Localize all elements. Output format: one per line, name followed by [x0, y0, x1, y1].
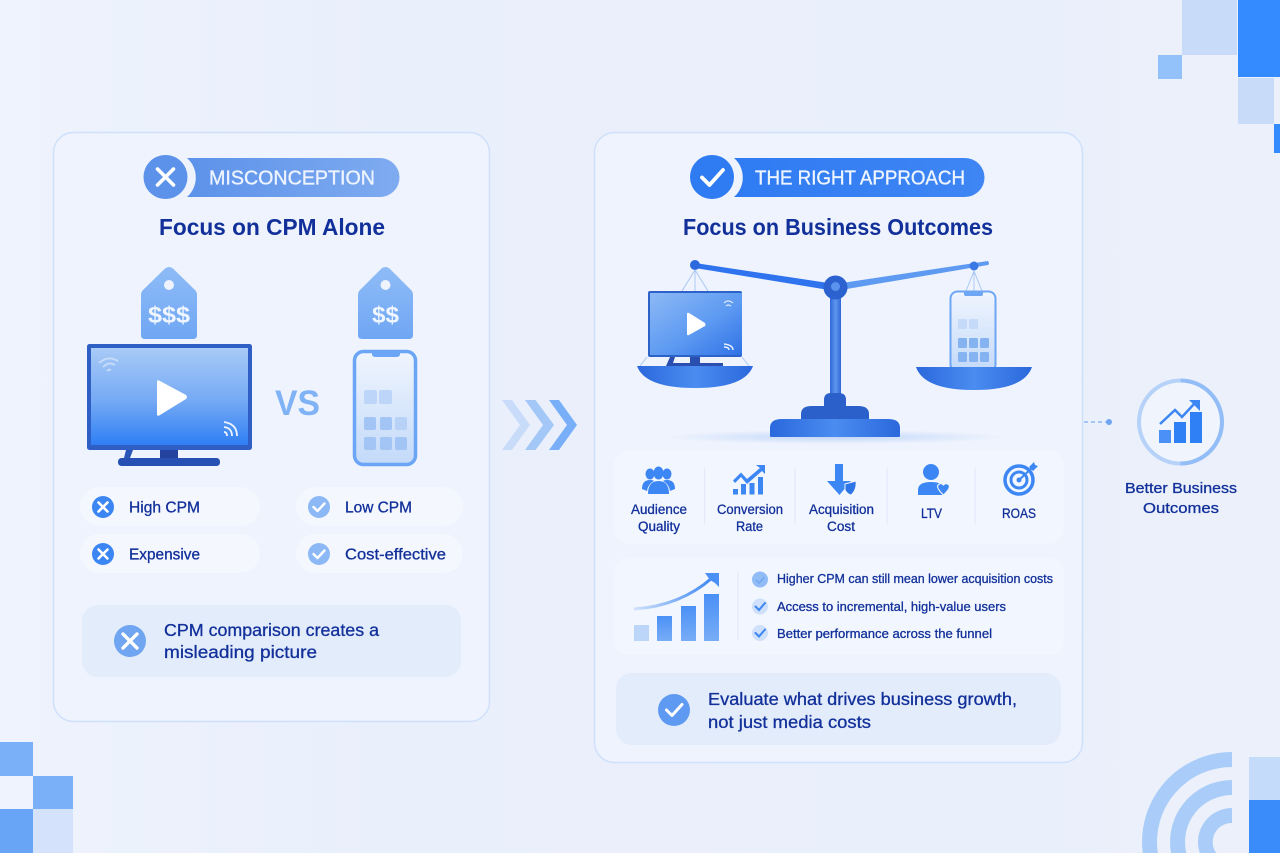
icon: price tag $$: $$ [372, 302, 399, 328]
metric: acquisition cost: Cost [827, 519, 855, 534]
pill: high CPM [80, 487, 260, 526]
pill: low CPM: Low CPM [345, 500, 412, 516]
bullet: high-value users: Access to incremental, high-value users [777, 599, 1006, 614]
pill: cost-effective [296, 534, 463, 573]
callout: misleading picture [82, 605, 461, 677]
metric: LTV [918, 464, 949, 521]
pill: expensive [80, 534, 260, 573]
decoration: top right squares [1158, 0, 1280, 153]
metric: LTV: LTV [921, 506, 942, 521]
illustration: balance scale [637, 260, 1032, 444]
left pan [637, 366, 753, 388]
outcome: better business outcomes [1125, 380, 1237, 517]
connector: dashed line to outcome [1084, 419, 1112, 425]
outcome: better business outcomes: Better Business [1125, 480, 1237, 497]
right pan [916, 367, 1032, 390]
label: VS: VS [275, 384, 320, 423]
card: benefits [614, 558, 1064, 655]
metric: acquisition cost [809, 464, 874, 534]
beam and stand [690, 260, 989, 437]
decoration: bottom right arcs and blocks [1142, 752, 1280, 853]
icon: television [87, 344, 252, 466]
hangers [640, 270, 982, 366]
pill: cost-effective: Cost-effective [345, 546, 446, 564]
badge: the right approach: THE RIGHT APPROACH [755, 168, 965, 190]
metric: ROAS [1002, 462, 1038, 521]
badge: misconception: MISCONCEPTION [209, 168, 375, 190]
card: metrics [614, 450, 1064, 544]
outcome: better business outcomes: Outcomes [1143, 500, 1219, 517]
metric: audience quality [631, 466, 687, 534]
panel: misconception [54, 132, 490, 722]
metric: acquisition cost: Acquisition [809, 502, 874, 517]
metric: conversion rate: Rate [736, 519, 763, 534]
callout: misleading picture: CPM comparison creates a [164, 620, 379, 640]
decoration: bottom left squares [0, 742, 73, 853]
icon: price tag $$ [358, 267, 413, 339]
metric: conversion rate [717, 465, 783, 534]
panel: the right approach [594, 132, 1082, 762]
callout: misleading picture: misleading picture [164, 642, 317, 662]
icon: price tag $$$ [141, 267, 197, 339]
bar chart [634, 573, 719, 641]
pill: low CPM [296, 487, 463, 526]
pill: high CPM: High CPM [129, 500, 200, 516]
bullet: better performance: Better performance across the funnel [777, 626, 992, 641]
callout: evaluate growth [616, 673, 1061, 745]
heading: focus on CPM alone: Focus on CPM Alone [159, 214, 385, 240]
icon: smartphone [354, 352, 416, 464]
metric: audience quality: Quality [638, 519, 680, 534]
callout: evaluate growth: not just media costs [708, 712, 871, 732]
scale television [648, 291, 742, 366]
callout: evaluate growth: Evaluate what drives business growth, [708, 689, 1017, 709]
badge: misconception [144, 155, 400, 199]
metric: ROAS: ROAS [1002, 506, 1036, 521]
arrow: chevrons [502, 400, 577, 450]
metric: conversion rate: Conversion [717, 502, 783, 517]
icon: price tag $$$: $$$ [148, 302, 190, 328]
metric: audience quality: Audience [631, 502, 687, 517]
pill: expensive: Expensive [129, 546, 200, 564]
heading: focus on business outcomes: Focus on Business Outcomes [683, 214, 993, 240]
scale phone [950, 291, 996, 372]
bullet: lower acquisition costs: Higher CPM can still mean lower acquisition costs [777, 571, 1053, 586]
badge: the right approach [690, 155, 984, 199]
